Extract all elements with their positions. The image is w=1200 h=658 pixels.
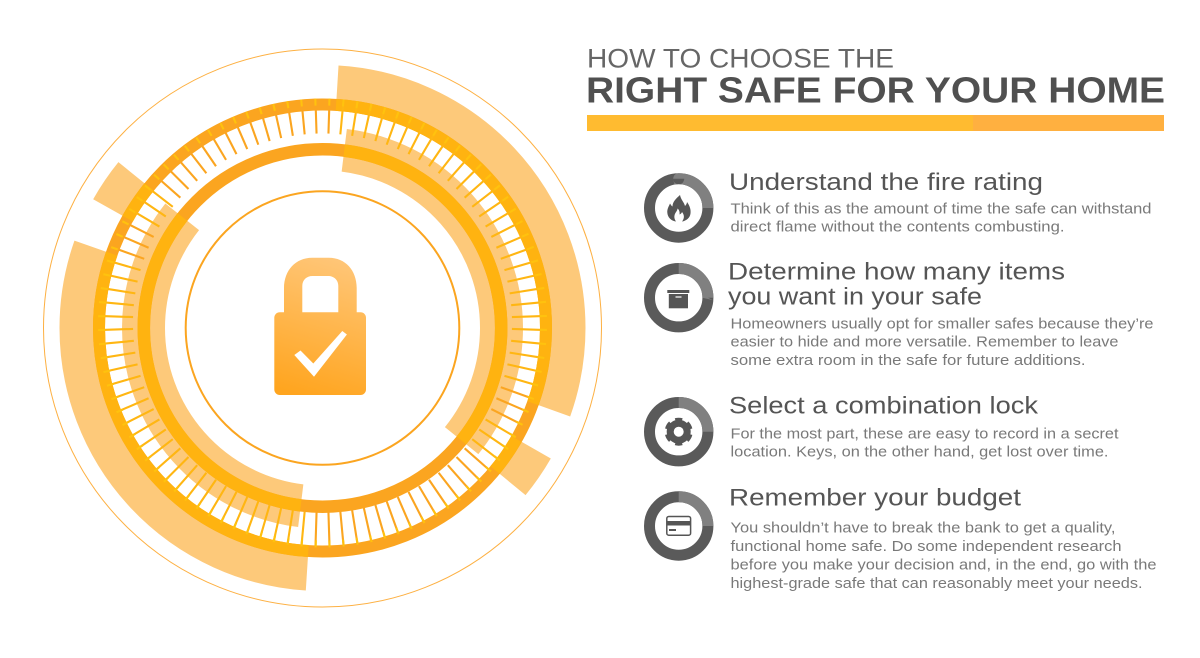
description: functional home safe. Do some independent research <box>730 538 1122 555</box>
dial graphic <box>44 49 602 607</box>
item: number of items <box>650 258 1154 369</box>
title: RIGHT SAFE FOR YOUR HOME <box>586 69 1165 110</box>
description <box>730 520 1156 592</box>
icon: credit card in ring <box>650 497 708 555</box>
icon: padlock with check mark <box>274 258 366 395</box>
heading: Remember your budget <box>729 485 1021 512</box>
orange ticks <box>112 99 533 547</box>
description: easier to hide and more versatile. Remember to leave <box>730 334 1118 351</box>
item: fire rating <box>650 169 1152 237</box>
description: location. Keys, on the other hand, get lost over time. <box>730 444 1108 461</box>
yellow ticks <box>99 100 546 546</box>
description: some extra room in the safe for future additions. <box>730 352 1086 369</box>
heading: you want in your safe <box>728 283 982 310</box>
heading: Determine how many items <box>728 258 1065 285</box>
heading: Understand the fire rating <box>729 169 1043 196</box>
item: budget <box>650 485 1156 592</box>
title <box>586 43 1165 110</box>
description <box>730 315 1154 369</box>
description: For the most part, these are easy to record in a secret <box>730 425 1119 442</box>
icon: flame in ring <box>650 179 708 237</box>
description: before you make your decision and, in the end, go with the <box>730 557 1156 574</box>
heading <box>728 258 1065 310</box>
thin outer circle <box>44 49 602 607</box>
thin inner circle <box>186 191 459 465</box>
pale orange arc bands <box>76 82 568 574</box>
outer segmented ring <box>99 104 546 552</box>
radial tick marks <box>99 99 546 547</box>
title: HOW TO CHOOSE THE <box>587 43 894 73</box>
description: highest-grade safe that can reasonably meet your needs. <box>730 575 1142 592</box>
item: combination lock <box>650 392 1119 461</box>
icon: storage box in ring <box>650 268 708 327</box>
description: Homeowners usually opt for smaller safes because they’re <box>730 315 1154 332</box>
description: You shouldn’t have to break the bank to get a quality, <box>730 520 1116 537</box>
title underline bar <box>587 115 1164 131</box>
description <box>730 200 1152 236</box>
icon: gear in ring <box>650 402 708 461</box>
description: direct flame without the contents combusting. <box>730 219 1064 236</box>
bright tick tips <box>102 102 544 544</box>
description <box>730 425 1119 461</box>
description: Think of this as the amount of time the safe can withstand <box>730 200 1152 217</box>
heading: Select a combination lock <box>729 392 1039 419</box>
middle segmented ring <box>144 149 501 507</box>
